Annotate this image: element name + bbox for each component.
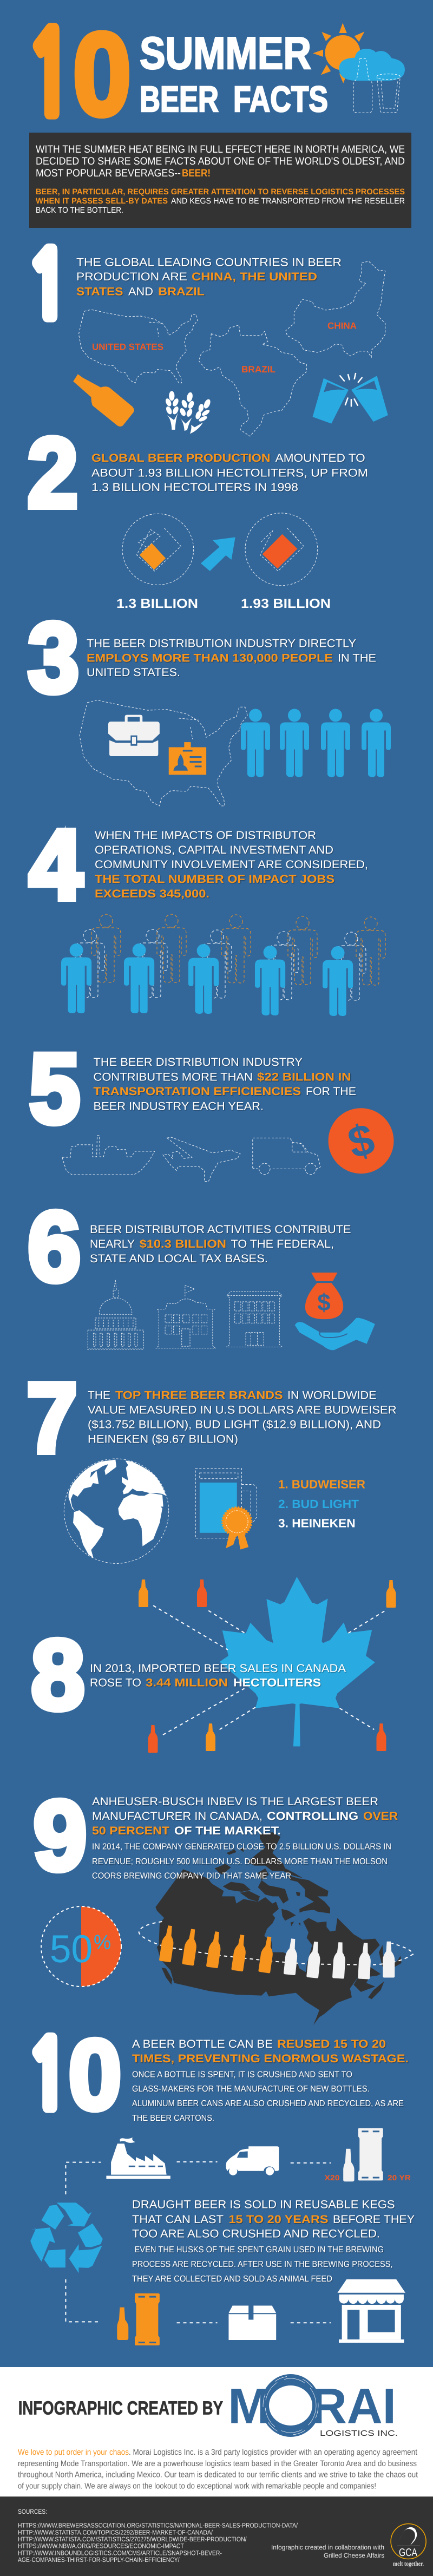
panel: sources footer bbox=[0, 2496, 433, 2576]
fact 4 text: COMMUNITY INVOLVEMENT ARE CONSIDERED, bbox=[95, 858, 368, 871]
icon: globe bbox=[64, 1459, 169, 1563]
fact 2 text: 1.3 BILLION HECTOLITERS IN 1998 bbox=[91, 481, 298, 494]
recycling flow connectors bbox=[65, 2162, 331, 2323]
fact 3 text: IN THE bbox=[338, 652, 376, 664]
fact 6 text: TO THE FEDERAL, bbox=[231, 1238, 334, 1250]
logo: gca: GCA bbox=[399, 2547, 418, 2559]
draught beer text: PROCESS ARE RECYCLED. AFTER USE IN THE BREWING PROCESS, bbox=[132, 2260, 393, 2269]
title: BEER bbox=[140, 79, 219, 120]
fact 5 text: TRANSPORTATION EFFICIENCIES bbox=[93, 1085, 301, 1098]
source links: HTTPS://WWW.BREWERSASSOCIATION.ORG/STATISTICS/NATIONAL-BEER-SALES-PRODUCTION-DATA/ bbox=[18, 2522, 298, 2529]
draught beer text bbox=[132, 2199, 415, 2284]
about morai text bbox=[18, 2448, 418, 2490]
fact 7 text: TOP THREE BEER BRANDS bbox=[115, 1389, 283, 1402]
fact 5 text: FOR THE bbox=[306, 1085, 356, 1098]
icon: beer mug with rosette bbox=[195, 1469, 257, 1550]
chart: 50 percent pie: 50 bbox=[50, 1928, 93, 1971]
fact 8 text: IN 2013, IMPORTED BEER SALES IN CANADA bbox=[90, 1662, 346, 1675]
fact 4 text: THE TOTAL NUMBER OF IMPACT JOBS bbox=[95, 873, 334, 886]
number 4: 4 bbox=[29, 809, 82, 920]
icon: id badge bbox=[169, 742, 206, 775]
number 3: 3 bbox=[28, 602, 79, 713]
fact 7 text: IN WORLDWIDE bbox=[287, 1389, 377, 1402]
draught beer text: BEFORE THEY bbox=[333, 2213, 415, 2226]
fact 9 text bbox=[92, 1795, 398, 1881]
icon: delivery truck bbox=[226, 2146, 279, 2175]
icon: beer bottle bbox=[73, 374, 134, 427]
map: canada bbox=[155, 1832, 402, 2025]
map labels: UNITED STATES bbox=[92, 342, 163, 352]
draught beer text: THAT CAN LAST bbox=[132, 2213, 224, 2226]
fact 7 text bbox=[88, 1389, 397, 1446]
about morai text: We love to put order in your chaos bbox=[18, 2448, 129, 2457]
icon: clinking glasses bbox=[313, 373, 388, 424]
fact 10 text: ALUMINUM BEER CANS ARE ALSO CRUSHED AND RECYCLED, AS ARE bbox=[132, 2099, 404, 2108]
maps: united states, brazil, china bbox=[78, 261, 385, 436]
icon: recycling symbol bbox=[30, 2203, 103, 2273]
fact 4 text: WHEN THE IMPACTS OF DISTRIBUTOR bbox=[95, 829, 316, 842]
icon: orange bottle and keg bbox=[117, 2293, 160, 2345]
icon: office building bbox=[226, 1292, 282, 1347]
fact 5 text bbox=[93, 1056, 356, 1113]
fact 2 text bbox=[91, 452, 368, 494]
number 6: 6 bbox=[28, 1191, 81, 1302]
title: 0 bbox=[73, 9, 131, 140]
icon: bottle and keg with labels: X20 bbox=[325, 2173, 340, 2182]
panel: intro: AND KEGS HAVE TO BE TRANSPORTED FROM THE RESELLER bbox=[171, 196, 405, 206]
fact 10 text: THE BEER CARTONS. bbox=[132, 2114, 214, 2123]
fact 9 text: OVER bbox=[363, 1810, 398, 1823]
logo: morai logistics bbox=[228, 2374, 398, 2438]
fact 10 text: ONCE A BOTTLE IS SPENT, IT IS CRUSHED AND SENT TO bbox=[132, 2070, 352, 2079]
title: SUMMER bbox=[140, 28, 311, 78]
fact 5 text: THE BEER DISTRIBUTION INDUSTRY bbox=[93, 1056, 303, 1069]
fact 2 text: GLOBAL BEER PRODUCTION bbox=[91, 452, 271, 464]
production labels bbox=[116, 597, 331, 611]
icon: dollar coin: $ bbox=[343, 1115, 379, 1168]
title: 1 bbox=[26, 19, 74, 132]
fact 10 text: GLASS-MAKERS FOR THE MANUFACTURE OF NEW BOTTLES. bbox=[132, 2085, 370, 2094]
logo: gca bbox=[391, 2523, 426, 2567]
fact 7 text: ($13.752 BILLION), BUD LIGHT ($12.9 BILLION), AND bbox=[88, 1418, 381, 1431]
fact 1 text: THE GLOBAL LEADING COUNTRIES IN BEER bbox=[76, 257, 342, 269]
icon: four employees bbox=[241, 709, 391, 777]
logo: morai logistics: LOGISTICS INC. bbox=[320, 2429, 398, 2438]
fact 7 text: HEINEKEN ($9.67 BILLION) bbox=[88, 1433, 238, 1446]
fact 3 text bbox=[87, 638, 376, 679]
icon: cardboard box bbox=[228, 2306, 276, 2340]
collaboration credit bbox=[271, 2544, 384, 2559]
source links bbox=[18, 2508, 298, 2564]
icon: impact jobs people group bbox=[61, 914, 385, 1016]
icon: wheat bbox=[165, 391, 212, 434]
chart: production growth diamonds and arrow bbox=[122, 513, 318, 586]
icon: bottle and keg with labels: 20 YR bbox=[388, 2173, 411, 2182]
list: top three brands: 1. BUDWEISER bbox=[278, 1478, 365, 1491]
number 8: 8 bbox=[31, 1619, 84, 1730]
panel: intro: BACK TO THE BOTTLER. bbox=[36, 206, 123, 215]
fact 6 text: $10.3 BILLION bbox=[140, 1238, 226, 1250]
icon: dollar coin bbox=[328, 1108, 394, 1174]
fact 1 text: STATES bbox=[76, 286, 123, 298]
icon: orbit ring and bottles over canada bbox=[139, 1922, 413, 1979]
number 9: 9 bbox=[34, 1780, 87, 1891]
icon: maple leaf bbox=[153, 1577, 384, 1746]
chart: 50 percent pie: % bbox=[94, 1931, 111, 1954]
icon: bottle and keg with labels bbox=[325, 2128, 411, 2182]
source links: HTTP://WWW.STATISTA.COM/TOPICS/2292/BEER-MARKET-OF-CANADA/ bbox=[18, 2528, 213, 2536]
number 10 bbox=[27, 2019, 121, 2130]
fact 8 text: HECTOLITERS bbox=[233, 1677, 321, 1689]
fact 1 text: CHINA, THE UNITED bbox=[192, 271, 317, 283]
icon: government building bbox=[156, 1286, 215, 1348]
fact 10 text: REUSED 15 TO 20 bbox=[277, 2038, 386, 2050]
fact 5 text: $22 BILLION IN bbox=[257, 1071, 351, 1084]
fact 9 text: CONTROLLING bbox=[267, 1810, 358, 1823]
fact 1 text: AND bbox=[128, 286, 153, 298]
panel: created by: INFOGRAPHIC CREATED BY bbox=[18, 2398, 223, 2419]
icon: bottles around the leaf bbox=[139, 1579, 396, 1753]
panel: intro: MOST POPULAR BEVERAGES-- bbox=[36, 167, 181, 179]
chart: 50 percent pie bbox=[41, 1906, 121, 1987]
fact 10 text: TIMES, PREVENTING ENORMOUS WASTAGE. bbox=[132, 2053, 409, 2065]
fact 7 text: THE bbox=[88, 1389, 110, 1402]
number 10: 1 bbox=[27, 2029, 70, 2122]
fact 6 text: STATE AND LOCAL TAX BASES. bbox=[90, 1253, 268, 1265]
fact 10 text: A BEER BOTTLE CAN BE bbox=[132, 2038, 273, 2050]
fact 10 text bbox=[132, 2038, 409, 2123]
number 2: 2 bbox=[27, 417, 78, 528]
source links: SOURCES: bbox=[18, 2508, 47, 2515]
number 10: 0 bbox=[69, 2019, 121, 2130]
fact 5 text: BEER INDUSTRY EACH YEAR. bbox=[93, 1100, 264, 1113]
list: top three brands: 2. BUD LIGHT bbox=[278, 1497, 359, 1511]
icon: money bag on hand: $ bbox=[317, 1289, 331, 1316]
fact 7 text: VALUE MEASURED IN U.S DOLLARS ARE BUDWEISER bbox=[88, 1404, 397, 1417]
fact 9 text: ANHEUSER-BUSCH INBEV IS THE LARGEST BEER bbox=[92, 1795, 378, 1808]
panel: intro bbox=[29, 133, 411, 228]
fact 2 text: AMOUNTED TO bbox=[275, 452, 365, 464]
panel: intro: BEER, IN PARTICULAR, REQUIRES GREATER ATTENTION TO REVERSE LOGISTICS PROCESSES bbox=[36, 187, 405, 196]
panel: intro: WHEN IT PASSES SELL-BY DATES bbox=[36, 196, 168, 206]
draught beer text: TOO ARE ALSO CRUSHED AND RECYCLED. bbox=[132, 2228, 380, 2240]
fact 9 text: 50 PERCENT bbox=[92, 1825, 169, 1837]
fact 6 text: NEARLY bbox=[90, 1238, 135, 1250]
fact 9 text: MANUFACTURER IN CANADA, bbox=[92, 1810, 263, 1823]
source links: HTTP://WWW.STATISTA.COM/STATISTICS/270275/WORLDWIDE-BEER-PRODUCTION/ bbox=[18, 2535, 247, 2543]
fact 1 text: BRAZIL bbox=[158, 286, 205, 298]
fact 4 text: EXCEEDS 345,000. bbox=[95, 888, 209, 900]
list: top three brands: 3. HEINEKEN bbox=[278, 1517, 356, 1530]
production labels: 1.3 BILLION bbox=[116, 597, 198, 611]
collaboration credit: Infographic created in collaboration with bbox=[271, 2544, 384, 2551]
fact 9 text: REVENUE; ROUGHLY 500 MILLION U.S. DOLLARS MORE THAN THE MOLSON bbox=[92, 1857, 388, 1866]
fact 8 text bbox=[90, 1662, 346, 1689]
fact 4 text: OPERATIONS, CAPITAL INVESTMENT AND bbox=[95, 844, 333, 856]
title bbox=[26, 9, 328, 140]
number 1: 1 bbox=[27, 241, 70, 331]
number 5: 5 bbox=[29, 1033, 80, 1144]
draught beer text: THEY ARE COLLECTED AND SOLD AS ANIMAL FEED bbox=[132, 2275, 332, 2284]
map labels: CHINA bbox=[327, 321, 357, 331]
panel: intro: DECIDED TO SHARE SOME FACTS ABOUT ONE OF THE WORLD'S OLDEST, AND bbox=[36, 155, 405, 167]
source links: HTTP://WWW.INBOUNDLOGISTICS.COM/CMS/ARTICLE/SNAPSHOT-BEVER- bbox=[18, 2549, 222, 2557]
logo: morai logistics: RAI bbox=[311, 2379, 396, 2434]
draught beer text: DRAUGHT BEER IS SOLD IN REUSABLE KEGS bbox=[132, 2199, 395, 2211]
fact 8 text: 3.44 MILLION bbox=[146, 1677, 228, 1689]
map: united states employment bbox=[80, 700, 247, 806]
about morai text: of your supply chain. We are always on the lookout to do exceptional work with remarkable people and companies! bbox=[18, 2481, 376, 2490]
icon: store bbox=[337, 2279, 405, 2343]
fact 6 text bbox=[90, 1223, 351, 1265]
icon: capitol building bbox=[87, 1280, 144, 1349]
fact 4 text bbox=[95, 829, 368, 900]
draught beer text: 15 TO 20 YEARS bbox=[228, 2213, 328, 2226]
number 7: 7 bbox=[27, 1362, 77, 1473]
fact 3 text: THE BEER DISTRIBUTION INDUSTRY DIRECTLY bbox=[87, 638, 356, 650]
fact 1 text bbox=[76, 257, 342, 298]
collaboration credit: Grilled Cheese Affairs bbox=[324, 2552, 384, 2559]
production labels: 1.93 BILLION bbox=[241, 597, 331, 611]
fact 1 text: PRODUCTION ARE bbox=[76, 271, 187, 283]
fact 9 text: IN 2014, THE COMPANY GENERATED CLOSE TO 2.5 BILLION U.S. DOLLARS IN bbox=[92, 1843, 391, 1852]
fact 3 text: EMPLOYS MORE THAN 130,000 PEOPLE bbox=[87, 652, 333, 664]
title: FACTS bbox=[233, 79, 328, 120]
fact 9 text: COORS BREWING COMPANY DID THAT SAME YEAR bbox=[92, 1872, 291, 1881]
icon: sun, cloud and dashed beer bottle and glass bbox=[313, 23, 405, 113]
icon: briefcase bbox=[108, 715, 160, 756]
logo: morai logistics: M bbox=[228, 2379, 270, 2434]
source links: HTTPS://WWW.NBWA.ORG/RESOURCES/ECONOMIC-IMPACT bbox=[18, 2542, 185, 2550]
panel: created by bbox=[0, 2367, 433, 2496]
icons: ship, plane, truck bbox=[62, 1136, 320, 1182]
fact 6 text: BEER DISTRIBUTOR ACTIVITIES CONTRIBUTE bbox=[90, 1223, 351, 1236]
panel: intro: BEER! bbox=[182, 167, 211, 179]
source links: AGE-COMPANIES-THIRST-FOR-SUPPLY-CHAIN-EFFICIENCY/ bbox=[18, 2556, 180, 2564]
icon: factory bbox=[106, 2138, 170, 2179]
fact 9 text: OF THE MARKET. bbox=[174, 1825, 281, 1837]
list: top three brands bbox=[278, 1478, 365, 1530]
fact 2 text: ABOUT 1.93 BILLION HECTOLITERS, UP FROM bbox=[91, 467, 368, 480]
draught beer text: EVEN THE HUSKS OF THE SPENT GRAIN USED IN THE BREWING bbox=[134, 2245, 384, 2254]
fact 3 text: UNITED STATES. bbox=[87, 666, 180, 679]
fact 8 text: ROSE TO bbox=[90, 1677, 141, 1689]
map labels: BRAZIL bbox=[241, 364, 275, 375]
fact 5 text: CONTRIBUTES MORE THAN bbox=[93, 1071, 253, 1084]
logo: gca: melt together. bbox=[393, 2560, 424, 2567]
icon: money bag on hand bbox=[295, 1273, 375, 1350]
map labels bbox=[92, 321, 357, 375]
